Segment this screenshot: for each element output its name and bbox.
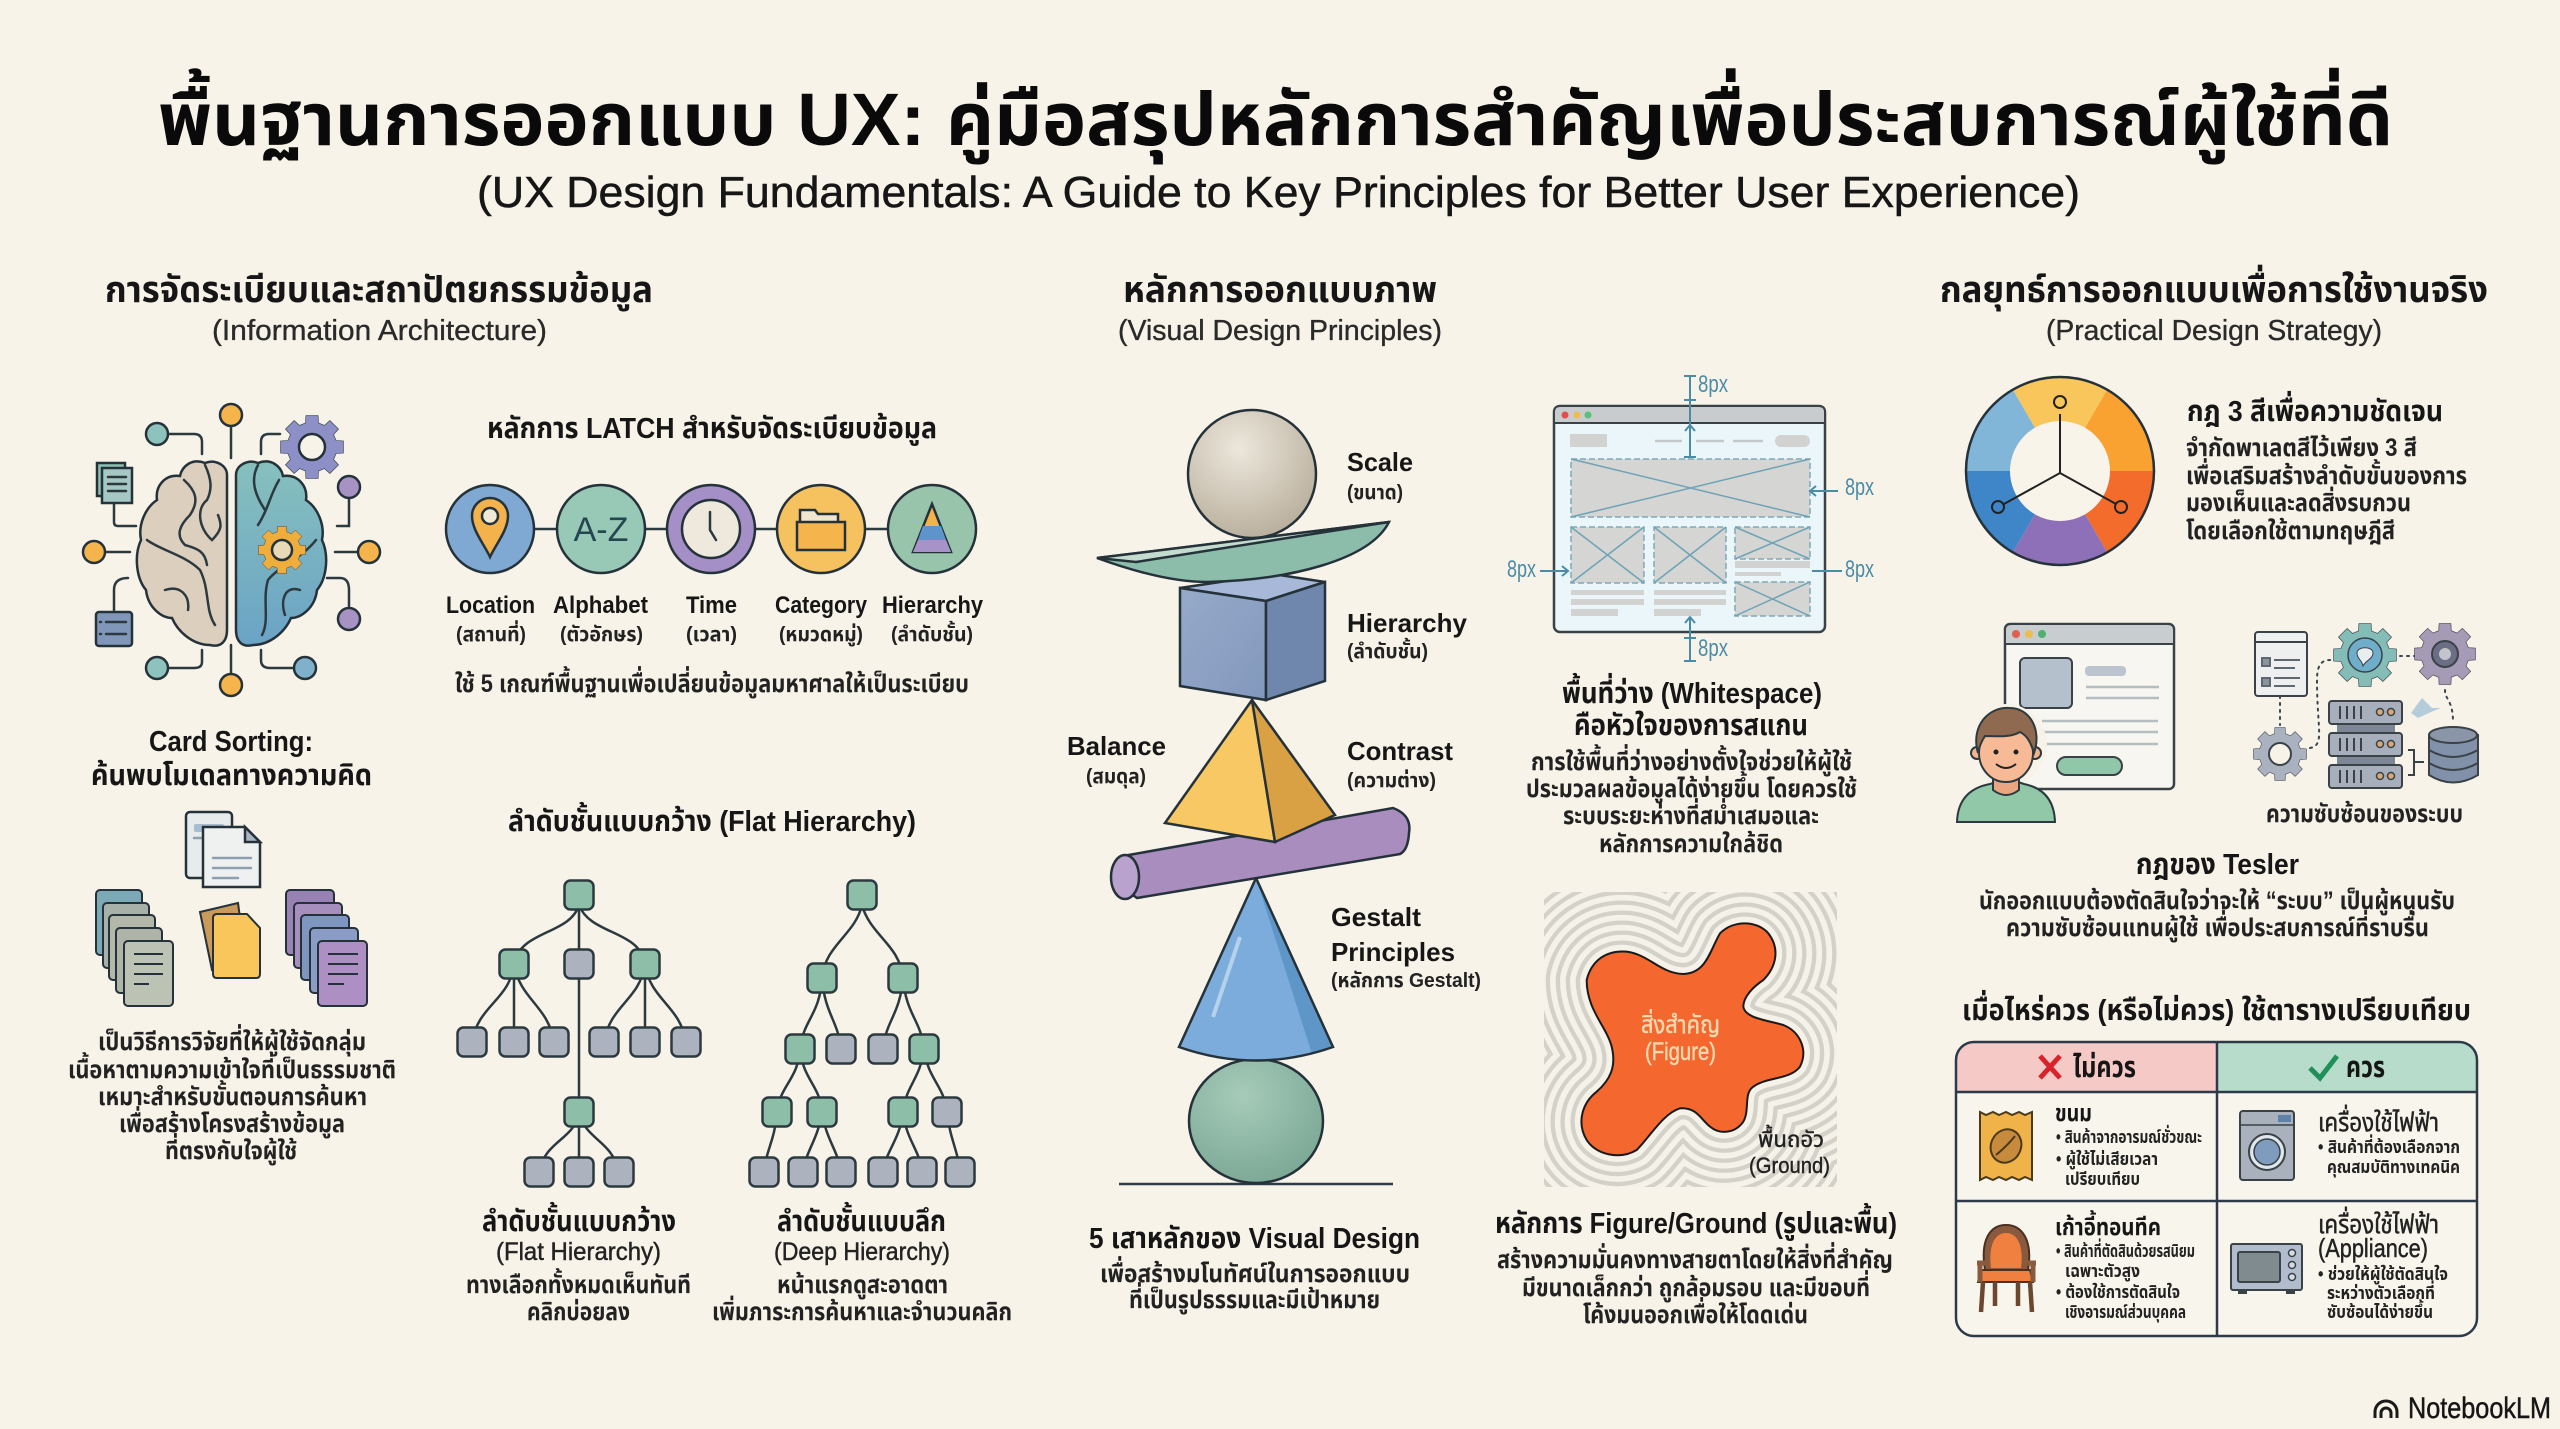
cell: antique chair: • สินค้าที่ตัดสินด้วยรสนิยม — [2056, 1238, 2195, 1261]
label: gestalt — [1331, 902, 1481, 992]
cell: appliance microwave: เครื่องใช้ไฟฟ้า — [2318, 1206, 2439, 1239]
caption: flat hierarchy: คลิกบ่อยลง — [527, 1298, 630, 1326]
caption: deep hierarchy: ลำดับชั้นแบบลึก — [777, 1201, 946, 1238]
card sorting description: เพื่อสร้างโครงสร้างข้อมูล — [119, 1106, 345, 1139]
icon: time — [667, 485, 755, 573]
cell: snacks: • สินค้าจากอารมณ์ชั่วขณะ — [2056, 1125, 2202, 1147]
3 colour text: จำกัดพาเลตสีไว้เพียง 3 สี — [2186, 434, 2417, 462]
spacing labels: 8px — [1845, 474, 1874, 501]
whitespace text: หลักการความใกล้ชิด — [1599, 830, 1783, 858]
card sorting description: เนื้อหาตามความเข้าใจที่เป็นธรรมชาติ — [68, 1052, 396, 1084]
icon: colour wheel — [1966, 377, 2154, 565]
label: scale — [1347, 447, 1413, 504]
icon: documents — [186, 812, 260, 887]
3 colour text: กฎ 3 สีเพื่อความชัดเจน — [2187, 390, 2443, 428]
cell: appliance microwave: • ช่วยให้ผู้ใช้ตัดสินใจ — [2318, 1264, 2448, 1285]
heading: visual design: หลักการออกแบบภาพ — [1123, 269, 1437, 310]
figure ground text — [1495, 1202, 1897, 1329]
cell: appliance microwave: ระหว่างตัวเลือกที่ — [2327, 1280, 2435, 1303]
panel: whitespace — [1507, 371, 1874, 858]
heading: information architecture: (Information Architecture) — [212, 315, 547, 347]
cell: snacks — [1980, 1100, 2202, 1189]
shape: beige sphere — [1188, 410, 1316, 538]
caption: deep hierarchy: (Deep Hierarchy) — [774, 1238, 950, 1266]
cell: appliance washer: • สินค้าที่ต้องเลือกจาก — [2318, 1134, 2460, 1157]
label: scale: (ขนาด) — [1347, 482, 1403, 504]
icon: A-Z — [557, 485, 645, 573]
title: (UX Design Fundamentals: A Guide to Key Principles for Better User Experience) — [477, 168, 2080, 217]
chart: balanced stack of 3D shapes — [1067, 410, 1481, 1184]
heading: visual design: (Visual Design Principles) — [1118, 315, 1442, 347]
label: balance: (สมดุล) — [1086, 766, 1146, 788]
heading: card sorting — [91, 726, 372, 792]
header: do not — [2040, 1052, 2136, 1084]
icon: location — [446, 485, 534, 573]
tesler text: ความซับซ้อนแทนผู้ใช้ เพื่อประสบการณ์ที่ราบรื่น — [2006, 910, 2429, 943]
table frame — [1956, 1042, 2477, 1336]
whitespace text: ระบบระยะห่างที่สม่ำเสมอและ — [1563, 798, 1819, 830]
spacing labels: 8px — [1698, 635, 1728, 662]
label: hierarchy: (ลำดับชั้น) — [1347, 638, 1428, 663]
illustration: user and simple interface — [1957, 624, 2174, 822]
spacing labels: 8px — [1845, 556, 1874, 583]
icon: category — [777, 485, 865, 573]
cell: antique chair: เชิงอารมณ์ส่วนบุคคล — [2065, 1302, 2186, 1323]
cell: appliance washer: เครื่องใช้ไฟฟ้า — [2318, 1104, 2439, 1137]
figure label: (Figure) — [1645, 1038, 1716, 1066]
card sorting description — [68, 1024, 396, 1166]
ground line — [1119, 1183, 1393, 1185]
heading: practical strategy: (Practical Design Strategy) — [2046, 315, 2382, 347]
cell: antique chair: • ต้องใช้การตัดสินใจ — [2056, 1282, 2180, 1302]
panel: LATCH principles — [446, 413, 984, 699]
LATCH labels: Location — [446, 592, 535, 619]
cell: snacks: • ผู้ใช้ไม่เสียเวลา — [2056, 1149, 2158, 1170]
label: contrast — [1347, 736, 1453, 792]
LATCH labels: Alphabet — [553, 592, 648, 619]
spacing labels: 8px — [1507, 556, 1536, 583]
panel: card sorting — [68, 726, 396, 1166]
label: scale: Scale — [1347, 447, 1413, 477]
cell: antique chair: เฉพาะตัวสูง — [2065, 1261, 2140, 1282]
LATCH labels — [446, 592, 984, 646]
caption: 5 pillars: ที่เป็นรูปธรรมและมีเป้าหมาย — [1129, 1282, 1380, 1315]
panel: comparison table — [1956, 989, 2477, 1336]
caption: flat hierarchy: ลำดับชั้นแบบกว้าง — [482, 1201, 676, 1238]
cell: appliance microwave — [2231, 1206, 2448, 1322]
3 colour text: มองเห็นและลดสิ่งรบกวน — [2186, 486, 2411, 517]
heading: card sorting: ค้นพบโมเดลทางความคิด — [91, 760, 372, 792]
icon: A-Z: A-Z — [574, 511, 628, 549]
heading: card sorting: Card Sorting: — [149, 726, 313, 758]
header: do — [2310, 1052, 2385, 1084]
title: พื้นฐานการออกแบบ UX: คู่มือสรุปหลักการสำคัญเพื่อประสบการณ์ผู้ใช้ที่ดี — [158, 68, 2393, 165]
header: do not: ไม่ควร — [2073, 1052, 2136, 1084]
shape: yellow pyramid — [1165, 700, 1335, 842]
LATCH labels: Time — [686, 592, 737, 619]
heading: information architecture — [105, 269, 653, 347]
shape: blue cone — [1179, 878, 1333, 1060]
cell: snacks: เปรียบเทียบ — [2065, 1169, 2140, 1189]
shape: purple cylinder — [1111, 808, 1409, 899]
LATCH labels: (ลำดับชั้น) — [891, 621, 973, 646]
cell: appliance microwave: (Appliance) — [2318, 1233, 2428, 1263]
icon: yellow folder — [200, 903, 260, 978]
table heading: เมื่อไหร่ควร (หรือไม่ควร) ใช้ตารางเปรียบเทียบ — [1962, 989, 2471, 1027]
tesler text: นักออกแบบต้องตัดสินใจว่าจะให้ “ระบบ” เป็นผู้หนุนรับ — [1979, 887, 2455, 916]
figure ground illustration — [1544, 892, 1837, 1187]
icon: card stack right — [286, 890, 367, 1006]
spacing arrows — [1540, 376, 1842, 661]
card sorting description: เป็นวิธีการวิจัยที่ให้ผู้ใช้จัดกลุ่ม — [98, 1024, 366, 1057]
title — [158, 68, 2393, 217]
LATCH labels: (ตัวอักษร) — [560, 624, 643, 646]
ground label: (Ground) — [1749, 1153, 1830, 1178]
icon: hierarchy — [888, 485, 976, 573]
label: contrast: (ความต่าง) — [1347, 770, 1436, 792]
caption: flat hierarchy: ทางเลือกทั้งหมดเห็นทันที — [466, 1268, 691, 1299]
complexity caption: ความซับซ้อนของระบบ — [2266, 800, 2463, 828]
3 colour text: เพื่อเสริมสร้างลำดับขั้นของการ — [2186, 458, 2467, 490]
whitespace text — [1526, 672, 1857, 858]
shape: teal bowl — [1097, 522, 1389, 582]
chart: flat hierarchy tree — [458, 880, 700, 1186]
caption: flat hierarchy: (Flat Hierarchy) — [496, 1238, 661, 1266]
cell: antique chair: เก้าอี้ทอนทีค — [2055, 1210, 2161, 1241]
tesler text — [1979, 849, 2455, 943]
figure label: สิ่งสำคัญ — [1641, 1008, 1720, 1039]
caption: flat hierarchy — [466, 1201, 691, 1326]
spacing labels: 8px — [1698, 371, 1728, 398]
shape: green sphere — [1189, 1059, 1323, 1183]
illustration: system complexity — [2253, 624, 2478, 788]
label: gestalt: (หลักการ Gestalt) — [1331, 970, 1481, 992]
ground label: พื้นถอัว — [1758, 1124, 1824, 1152]
figure label — [1641, 1008, 1720, 1066]
caption: 5 pillars: 5 เสาหลักของ Visual Design — [1089, 1223, 1420, 1255]
caption: deep hierarchy: หน้าแรกดูสะอาดตา — [777, 1271, 948, 1300]
cell: appliance washer: คุณสมบัติทางเทคนิค — [2327, 1157, 2460, 1178]
LATCH summary: ใช้ 5 เกณฑ์พื้นฐานเพื่อเปลี่ยนข้อมูลมหาศาลให้เป็นระเบียบ — [455, 666, 969, 699]
label: hierarchy: Hierarchy — [1347, 608, 1468, 638]
cell: appliance microwave: ซับซ้อนได้ง่ายขึ้น — [2327, 1299, 2433, 1322]
icon: brain with connected nodes — [83, 404, 380, 696]
panel: 3 colour rule — [1966, 377, 2467, 565]
heading: practical strategy — [1940, 264, 2488, 347]
tesler text: กฎของ Tesler — [2136, 849, 2299, 881]
spacing labels — [1507, 371, 1874, 662]
card sorting description: ที่ตรงกับใจผู้ใช้ — [165, 1133, 297, 1166]
card sorting description: เหมาะสำหรับขั้นตอนการค้นหา — [98, 1080, 367, 1111]
3 colour text — [2186, 390, 2467, 545]
whitespace text: คือหัวใจของการสแกน — [1574, 710, 1808, 742]
ground label — [1749, 1124, 1830, 1178]
wireframe window — [1554, 406, 1825, 632]
caption: deep hierarchy — [712, 1201, 1012, 1326]
LATCH labels: Category — [775, 592, 868, 619]
whitespace text: พื้นที่ว่าง (Whitespace) — [1562, 672, 1822, 710]
cell: snacks: ขนม — [2055, 1100, 2092, 1127]
whitespace text: การใช้พื้นที่ว่างอย่างตั้งใจช่วยให้ผู้ใช้ — [1531, 744, 1852, 777]
figure ground text: มีขนาดเล็กกว่า ถูกล้อมรอบ และมีขอบที่ — [1522, 1270, 1870, 1303]
panel: figure / ground — [1495, 892, 1897, 1329]
heading: LATCH: หลักการ LATCH สำหรับจัดระเบียบข้อมูล — [487, 413, 937, 446]
cell: antique chair — [1977, 1210, 2195, 1323]
LATCH labels: (เวลา) — [686, 624, 737, 646]
figure ground text: โค้งมนออกเพื่อให้โดดเด่น — [1583, 1297, 1808, 1329]
panel: Tesler's law — [1957, 624, 2478, 943]
whitespace text: ประมวลผลข้อมูลได้ง่ายขึ้น โดยควรใช้ — [1526, 771, 1857, 804]
header: do: ควร — [2346, 1052, 2385, 1084]
label: gestalt: Principles — [1331, 937, 1455, 967]
label: gestalt: Gestalt — [1331, 902, 1421, 932]
chart: deep hierarchy tree — [750, 880, 974, 1186]
LATCH labels: (หมวดหมู่) — [779, 624, 863, 646]
shape: blue cube — [1180, 574, 1325, 700]
figure ground text: สร้างความมั่นคงทางสายตาโดยให้สิ่งที่สำคัญ — [1497, 1242, 1893, 1274]
LATCH labels: Hierarchy — [882, 592, 984, 619]
cell: appliance washer — [2240, 1104, 2460, 1180]
LATCH labels: (สถานที่) — [456, 620, 526, 646]
label: balance: Balance — [1067, 731, 1166, 761]
label: balance — [1067, 731, 1166, 788]
heading: flat hierarchy: ลำดับชั้นแบบกว้าง (Flat Hierarchy) — [508, 801, 916, 838]
caption: deep hierarchy: เพิ่มภาระการค้นหาและจำนวนคลิก — [712, 1295, 1012, 1326]
heading: practical strategy: กลยุทธ์การออกแบบเพื่อการใช้งานจริง — [1940, 264, 2488, 311]
heading: visual design — [1118, 269, 1442, 347]
label: contrast: Contrast — [1347, 736, 1453, 766]
caption: 5 pillars — [1089, 1223, 1420, 1315]
figure ground text: หลักการ Figure/Ground (รูปและพื้น) — [1495, 1202, 1897, 1241]
label: hierarchy — [1347, 608, 1468, 663]
caption: 5 pillars: เพื่อสร้างมโนทัศน์ในการออกแบบ — [1100, 1256, 1410, 1288]
icon: card stack left — [96, 890, 173, 1006]
connector line — [535, 528, 890, 530]
3 colour text: โดยเลือกใช้ตามทฤษฎีสี — [2186, 517, 2395, 545]
heading: information architecture: การจัดระเบียบและสถาปัตยกรรมข้อมูล — [105, 269, 653, 311]
panel: hierarchy trees — [458, 801, 1012, 1326]
